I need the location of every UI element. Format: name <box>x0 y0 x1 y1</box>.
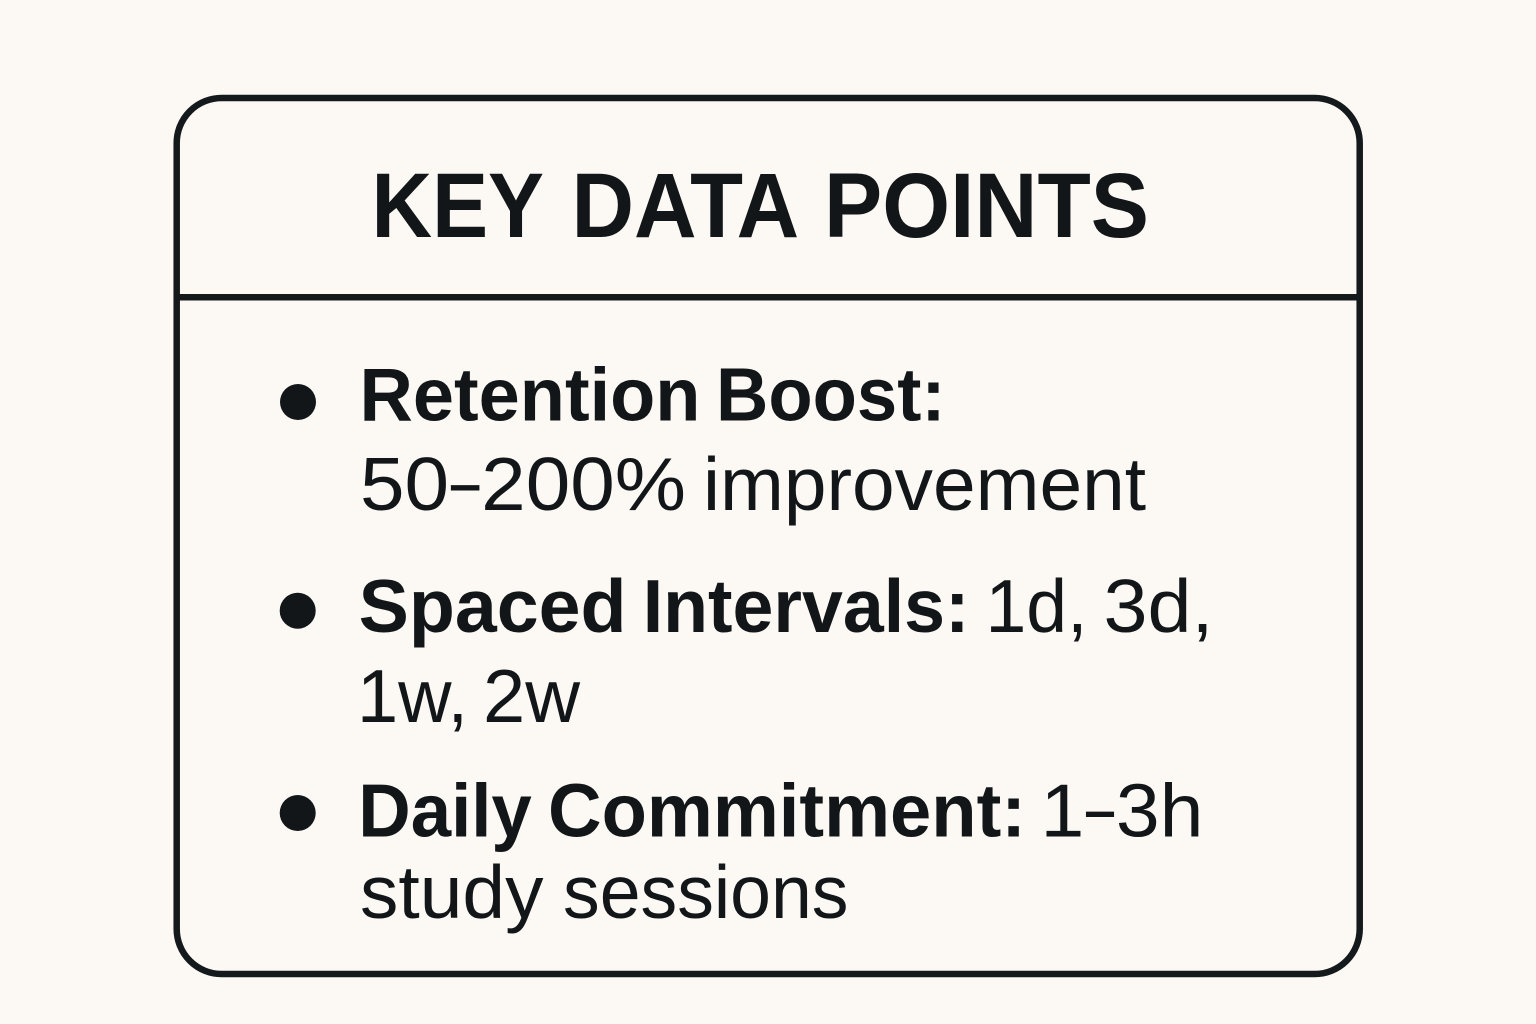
title: POINTS <box>824 155 1149 257</box>
value: 1–3h study sessions: – <box>1084 781 1116 841</box>
title: DATA <box>572 155 799 257</box>
value: 1–3h study sessions: 3h <box>1116 768 1204 852</box>
label: spaced intervals <box>359 564 970 648</box>
label: retention boost <box>360 352 946 436</box>
icon: bullet <box>280 593 316 629</box>
value: 1d, 3d, 1w, 2w <box>357 564 1214 738</box>
panel: key data points card <box>177 98 1360 974</box>
list item: spaced intervals <box>280 564 1214 738</box>
value: 1–3h study sessions: sessions <box>563 850 848 934</box>
icon: bullet <box>280 384 316 420</box>
title <box>372 155 1149 257</box>
list item: daily commitment <box>280 768 1204 934</box>
value: 50–200% improvement: – <box>449 455 481 515</box>
value: 1–3h study sessions: 1 <box>1040 768 1082 852</box>
label: daily commitment: Daily <box>358 768 532 852</box>
value: 1–3h study sessions: study <box>360 850 544 934</box>
label: retention boost: Boost: <box>716 352 946 436</box>
label: spaced intervals: Intervals: <box>643 564 970 648</box>
value: 50–200% improvement: 50 <box>360 442 443 526</box>
value: 50–200% improvement: 200% <box>481 442 686 526</box>
value: 1d, 3d, 1w, 2w: 1w, <box>357 654 468 738</box>
value: 1–3h study sessions <box>360 768 1204 934</box>
value: 50–200% improvement <box>360 442 1146 526</box>
value: 50–200% improvement: improvement <box>703 442 1146 526</box>
value: 1d, 3d, 1w, 2w: 3d, <box>1104 564 1214 648</box>
icon: bullet <box>280 795 316 831</box>
label: spaced intervals: Spaced <box>359 564 627 648</box>
title: KEY <box>372 155 544 257</box>
list item: retention boost <box>280 352 1146 526</box>
value: 1d, 3d, 1w, 2w: 1d, <box>986 564 1088 648</box>
value: 1d, 3d, 1w, 2w: 2w <box>483 654 581 738</box>
label: daily commitment: Commitment: <box>548 768 1026 852</box>
label: retention boost: Retention <box>360 352 700 436</box>
